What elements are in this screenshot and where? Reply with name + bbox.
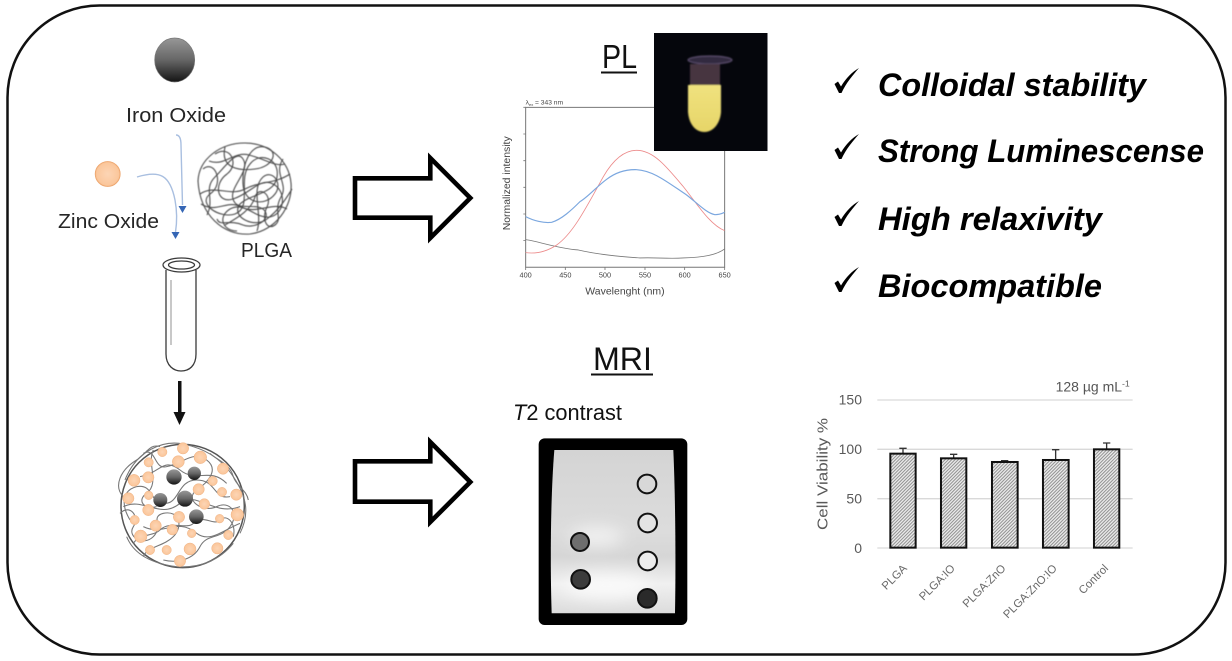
heading: PL: PL [602, 38, 637, 75]
excitation label: λ [526, 99, 529, 106]
chart: cell viability bars [816, 378, 1133, 621]
category labels: PLGA [880, 562, 910, 592]
wells [571, 475, 657, 608]
image: MRI phantom [539, 438, 687, 625]
arrow: zinc oxide to tube [137, 174, 180, 239]
concentration note: 128 µg mL [1056, 379, 1122, 395]
heading: MRI: MRI [593, 341, 652, 377]
category labels [880, 562, 1111, 621]
excitation label: ex [529, 102, 533, 107]
excitation label: = 343 nm [533, 99, 563, 106]
arrow: bottom outline arrow [355, 442, 470, 522]
label: Zinc Oxide: Zinc Oxide [58, 211, 159, 233]
category labels: Control [1077, 563, 1111, 597]
icon: iron oxide sphere [155, 38, 195, 82]
y tick labels [839, 392, 862, 556]
label: T2 contrast: T2 contrast [513, 400, 622, 425]
item: high relaxivity: High relaxivity [878, 201, 1104, 237]
y axis title: Normalized intensity [502, 136, 513, 230]
y tick labels: 150 [839, 392, 862, 408]
axis ticks [523, 107, 725, 270]
x tick labels [520, 271, 731, 280]
icon: composite nanoparticle [119, 443, 248, 568]
category labels: PLGA:ZnO:IO [1001, 562, 1060, 621]
blue curve [526, 170, 725, 223]
y axis title: Cell Viability % [816, 418, 832, 530]
item: biocompatible: Biocompatible [878, 268, 1102, 304]
grey curve [526, 240, 725, 258]
category labels: PLGA:ZnO [961, 562, 1009, 610]
x tick labels: 600 [679, 271, 691, 280]
icon: zinc oxide sphere [95, 162, 120, 186]
x tick labels: 450 [559, 271, 571, 280]
concentration note: -1 [1122, 378, 1130, 388]
photo: luminescent vial [654, 33, 768, 151]
gridlines [877, 400, 1133, 548]
y tick labels: 0 [854, 540, 862, 556]
x axis title: Wavelenght (nm) [585, 286, 665, 297]
arrow: tube to nanoparticle [174, 381, 186, 425]
error bars [899, 443, 1110, 462]
bars [890, 449, 1119, 548]
icon: test tube [163, 258, 200, 371]
y tick labels: 50 [846, 490, 862, 506]
x tick labels: 500 [599, 271, 611, 280]
red curve [526, 150, 725, 253]
item: strong luminescense: Strong Luminescense [878, 133, 1204, 169]
chart: PL spectrum [502, 99, 731, 297]
plot axes [526, 107, 725, 267]
arrow: top outline arrow [355, 158, 470, 238]
checklist [834, 67, 1204, 304]
arrow: iron oxide to tube [176, 135, 186, 213]
x tick labels: 400 [520, 271, 532, 280]
label: Iron Oxide: Iron Oxide [126, 105, 226, 127]
item: colloidal stability: Colloidal stability [878, 67, 1148, 103]
x tick labels: 550 [639, 271, 651, 280]
y tick labels: 100 [839, 441, 862, 457]
x tick labels: 650 [719, 271, 731, 280]
category labels: PLGA:IO [917, 562, 958, 603]
icon: PLGA polymer ball [198, 143, 292, 234]
label: PLGA: PLGA [241, 240, 293, 262]
